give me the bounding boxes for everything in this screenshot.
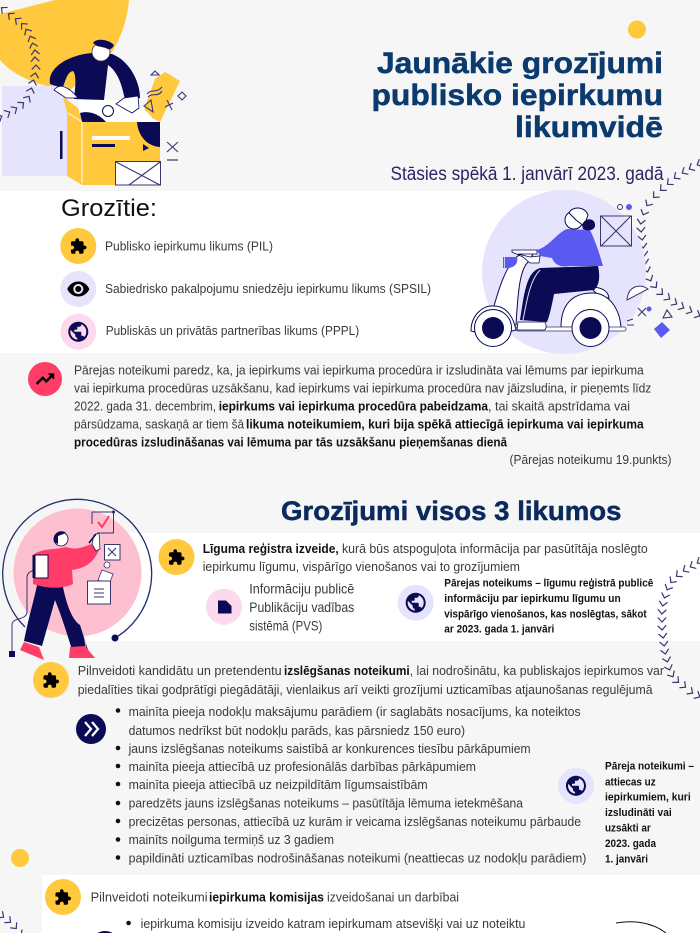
decorative yellow dot (628, 20, 646, 38)
list: exclusion changes: precizētas personas, attiecībā uz kurām ir veicama izslēgšanas noteikumu pārbaude (129, 814, 581, 829)
illustration: person ticking a checklist (3, 499, 152, 660)
text block: transition rules: (Pārejas noteikumu 19.punkts) (510, 452, 672, 467)
note: transition rule for exclusions: Pāreja noteikumi – (605, 760, 694, 772)
text block: transition rules: vai iepirkuma procedūras uzsākšanu, kad iepirkums vai iepirkuma procedūra nav jāizsludina, ir pieņemts līdz (74, 380, 651, 396)
illustration: person on a scooter (471, 190, 672, 354)
note: transition rule for exclusions: iepirkumiem, kuri (605, 792, 691, 804)
list: exclusion changes: paredzēts jauns izslēgšanas noteikums – pasūtītāja lēmuma ietekmēšana (129, 796, 524, 811)
list: exclusion changes: mainīts noilguma termiņš uz 3 gadiem (129, 832, 334, 847)
list item: utilities procurement law: Sabiedrisko pakalpojumu sniedzēju iepirkumu likums (SPSIL) (105, 281, 431, 296)
list item: public private partnership law (60, 314, 359, 350)
card: evaluation commission: izveidošanai un darbībai (327, 890, 459, 904)
list: exclusion changes: jauns izslēgšanas noteikums saistībā ar konkurences tiesību pārkāpumiem (128, 741, 531, 756)
list item: public private partnership law: Publiskās un privātās partnerības likums (PPPL) (106, 323, 359, 338)
text: publication in PVS (249, 580, 354, 634)
card: exclusion rules: izslēgšanas noteikumi (284, 663, 410, 678)
note: transition rule for register: Pārejas noteikums – līgumu reģistrā publicē (444, 576, 653, 590)
note: transition rule for exclusions: 1. janvāri (605, 854, 648, 866)
heading: amended laws: Grozītie: (61, 195, 157, 222)
card: contract register: kurā būs atspoguļota informācija par pasūtītāja noslēgto (342, 541, 648, 556)
text: publication in PVS: sistēmā (PVS) (249, 618, 322, 634)
card: exclusion rules: piedalīties tikai godprātīgi piegādātāji, vienlaikus arī veikti grozījumi uzticamības atjaunošanas regulējumā (78, 682, 653, 697)
list item: public procurement law (60, 228, 273, 264)
text block: transition rules: pārsūdzama, saskaņā ar tiem šā (74, 416, 245, 432)
panel: contract register band (78, 533, 700, 641)
panel: amended laws band (0, 191, 565, 353)
card: exclusion rules: Pilnveidoti kandidātu un pretendentu (78, 663, 282, 678)
list item: public procurement law: Publisko iepirkumu likums (PIL) (105, 238, 273, 254)
card: contract register (158, 539, 653, 636)
text block: transition rules: 2022. gada 31. decembrim, (74, 398, 216, 414)
note: transition rule for exclusions: attiecas uz (605, 776, 656, 788)
text block: transition rules: likuma noteikumiem, kuri bija spēkā attiecīgā iepirkuma vai iepirkuma (246, 416, 644, 432)
text block: transition rules: iepirkums vai iepirkuma procedūra pabeidzama (219, 398, 489, 414)
card: exclusion rules (33, 662, 665, 698)
icon: trending arrow (28, 362, 62, 396)
note: transition rule for exclusions (605, 760, 694, 866)
note: transition rule for exclusions: izsludināti vai (605, 807, 672, 819)
list: exclusion changes: mainīta pieeja attiecībā uz neizpildītām līgumsaistībām (129, 777, 428, 792)
heading: changes in all 3 laws: Grozījumi visos 3 likumos (281, 496, 622, 526)
panel: evaluation commission band (42, 875, 700, 933)
text block: transition rules (74, 362, 672, 467)
card: contract register: Līguma reģistra izveide, (203, 541, 339, 556)
note: transition rule for register: informāciju par iepirkumu līgumu un (444, 593, 621, 605)
card: evaluation commission: Pilnveidoti noteikumi (91, 890, 208, 904)
text block: transition rules: procedūras izsludināšanas vai lēmuma par tās uzsākšanu pieņemšanas dienā (74, 434, 508, 450)
icon: globe (558, 768, 594, 804)
card: evaluation commission (45, 879, 525, 933)
text: publication in PVS: Publikāciju vadības (249, 599, 354, 615)
title: Jaunākie grozījumi (377, 47, 663, 80)
text block: transition rules: , tai skaitā apstrīdama vai (488, 398, 630, 414)
chevron path: middle right (662, 562, 699, 696)
subtitle: Stāsies spēkā 1. janvārī 2023. gadā (390, 164, 664, 185)
note: transition rule for exclusions: uzsākti ar (605, 822, 651, 834)
chevron path: top right (641, 164, 699, 315)
card: evaluation commission: iepirkuma komisijas (209, 890, 324, 904)
title: likumvidē (515, 111, 663, 144)
list: exclusion changes: mainīta pieeja nodokļu maksājumu parādiem (ir saglabāts nosacījums, ka noteiktos (129, 704, 581, 719)
card: contract register: iepirkumu līgumu, vispārīgo vienošanos vai to grozījumiem (203, 559, 520, 574)
title (372, 47, 663, 144)
card: exclusion rules: , lai nodrošinātu, ka publiskajos iepirkumos var (410, 663, 665, 678)
text block: transition rules: Pārejas noteikumi paredz, ka, ja iepirkums vai iepirkuma procedūra ir izsludināta vai lēmums par iepirkuma (74, 362, 644, 378)
icon: globe (398, 585, 434, 621)
list: exclusion changes: mainīta pieeja attiecībā uz profesionālās darbības pārkāpumiem (129, 759, 476, 774)
chevron path: bottom left (2, 916, 20, 933)
text: publication in PVS: Informāciju publicē (249, 580, 354, 596)
list: exclusion changes: datumos nedrīkst būt nodokļu parāds, kas pārsniedz 150 euro) (129, 723, 465, 738)
card: evaluation commission: iepirkuma komisiju izveido katram iepirkumam atsevišķi vai uz noteiktu (141, 916, 525, 931)
decorative yellow dot (11, 849, 29, 867)
illustration: person opening a box (0, 0, 186, 185)
title: publisko iepirkumu (372, 79, 663, 112)
list: exclusion changes: papildināti uzticamības nodrošināšanas noteikumi (neattiecas uz nodokļu parādiem) (129, 850, 586, 865)
list item: utilities procurement law (60, 271, 431, 307)
arc: partial illustration at bottom (616, 922, 666, 933)
list: exclusion changes (116, 704, 586, 865)
icon: document (206, 589, 242, 625)
note: transition rule for exclusions: 2023. gada (605, 838, 657, 850)
note: transition rule for register: ar 2023. gada 1. janvāri (444, 624, 554, 636)
note: transition rule for register (444, 576, 653, 636)
icon: double chevron (76, 714, 106, 744)
note: transition rule for register: vispārīgo vienošanos, kas noslēgtas, sākot (444, 608, 647, 620)
